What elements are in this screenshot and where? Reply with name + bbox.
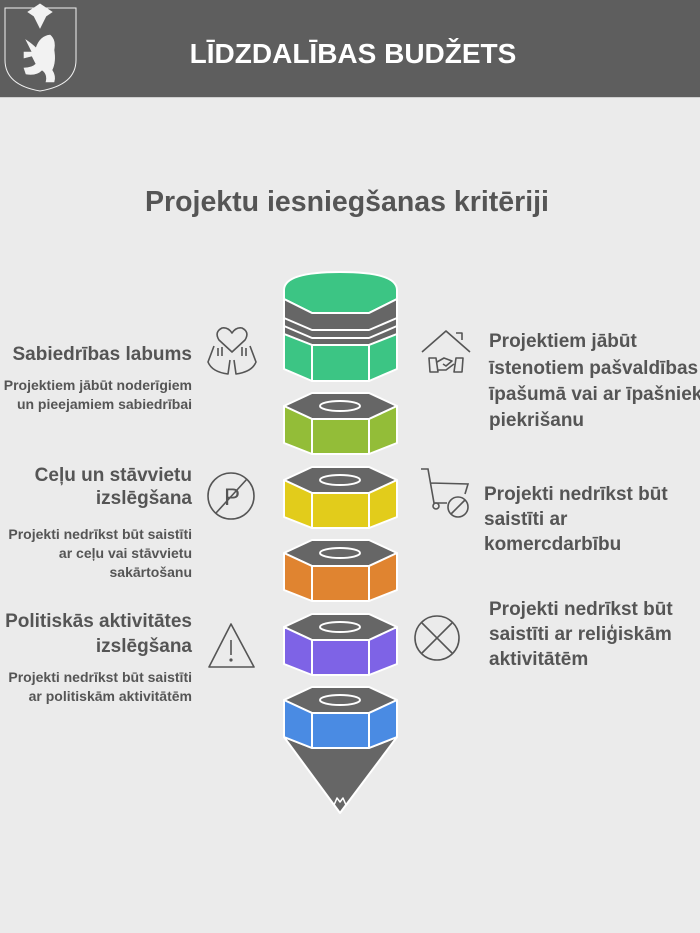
right item 3: aktivitātēm xyxy=(489,649,588,670)
left item 3: Politiskās aktivitātes xyxy=(5,611,192,632)
icon: no parking xyxy=(208,473,254,519)
top cap xyxy=(284,272,397,381)
nut: yellow xyxy=(284,467,397,528)
left item 2: izslēgšana xyxy=(96,488,192,509)
right item 1: īstenotiem pašvaldības xyxy=(488,358,698,379)
left item 1: Sabiedrības labums xyxy=(12,344,192,365)
right item 3: Projekti nedrīkst būt xyxy=(489,599,673,620)
right item 1: Projektiem jābūt xyxy=(489,331,637,352)
icon: house handshake xyxy=(422,331,470,372)
left item 3: Projekti nedrīkst būt saistīti xyxy=(8,669,192,685)
icon: hands heart xyxy=(208,328,256,374)
right item 2: komercdarbību xyxy=(484,534,621,555)
pencil stack xyxy=(284,272,397,813)
left item 1: Projektiem jābūt noderīgiem xyxy=(4,377,192,393)
left item 3: ar politiskām aktivitātēm xyxy=(29,688,192,704)
nut: blue with tip xyxy=(284,687,397,813)
icon: cart blocked xyxy=(421,469,468,517)
left item 2: Projekti nedrīkst būt saistīti xyxy=(8,526,192,542)
left item 2: Ceļu un stāvvietu xyxy=(35,465,192,486)
right item 2 xyxy=(484,484,668,555)
nut: purple xyxy=(284,614,397,675)
icon: coat of arms xyxy=(5,4,76,91)
icon: warning triangle xyxy=(209,624,254,667)
right item 1: piekrišanu xyxy=(489,410,584,431)
right item 3 xyxy=(489,599,673,670)
left item 2 xyxy=(8,465,192,580)
icon: circle cross xyxy=(415,616,459,660)
left item 2: ar ceļu vai stāvvietu xyxy=(59,545,192,561)
right item 1 xyxy=(488,331,700,431)
nut: green xyxy=(284,393,397,454)
header bar xyxy=(0,0,700,98)
title: LĪDZDALĪBAS BUDŽETS xyxy=(190,38,516,69)
right item 3: saistīti ar reliģiskām xyxy=(489,624,672,645)
right item 2: Projekti nedrīkst būt xyxy=(484,484,668,505)
left item 1: un pieejamiem sabiedrībai xyxy=(17,396,192,412)
left item 1 xyxy=(4,344,192,412)
left item 3 xyxy=(5,611,192,704)
left item 2: sakārtošanu xyxy=(110,564,192,580)
nut: orange xyxy=(284,540,397,601)
icon: no parking: P xyxy=(224,484,240,511)
left item 3: izslēgšana xyxy=(96,636,192,657)
subtitle heading: Projektu iesniegšanas kritēriji xyxy=(145,186,549,218)
right item 2: saistīti ar xyxy=(484,509,568,530)
